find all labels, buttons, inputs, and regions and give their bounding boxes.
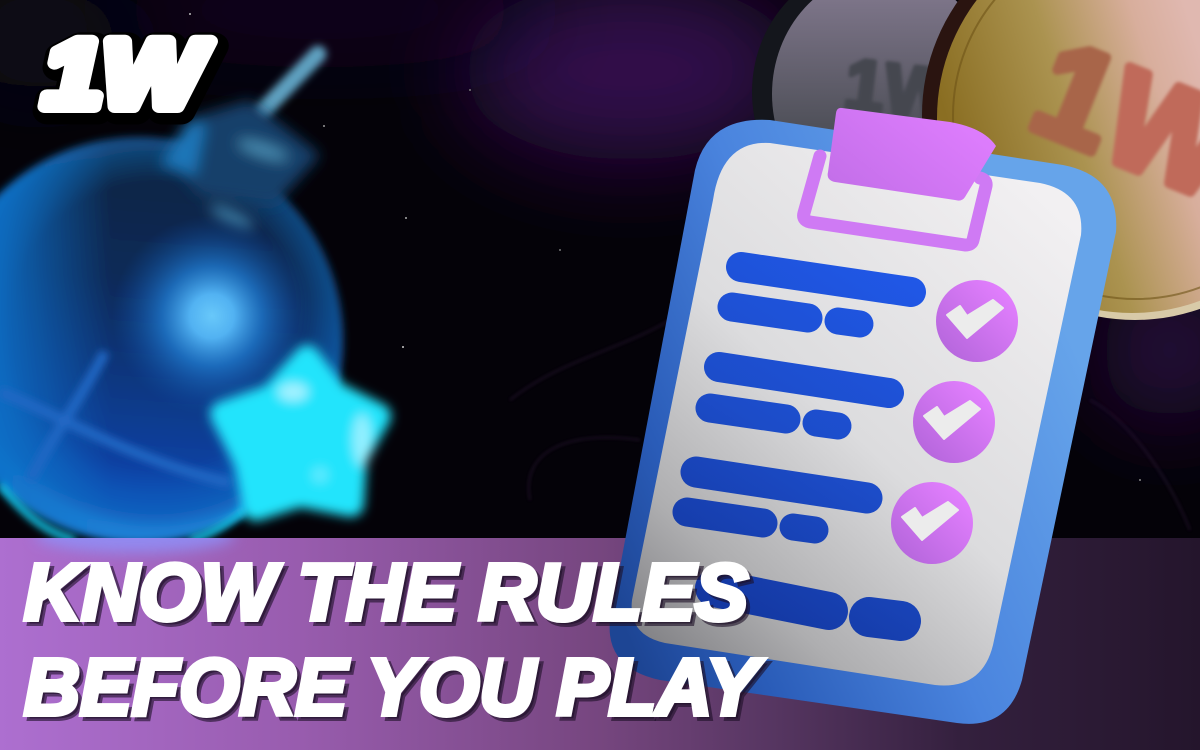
row 2	[710, 367, 995, 463]
heading shadow	[28, 552, 768, 736]
bomb body	[0, 137, 343, 543]
band glow	[34, 538, 238, 560]
bomb cap	[160, 100, 320, 232]
board paper	[632, 143, 1081, 685]
logo: 1W	[46, 26, 214, 132]
star	[223, 358, 378, 508]
bomb highlight	[112, 216, 312, 416]
row 1	[732, 267, 1018, 362]
row 3	[687, 472, 973, 564]
icon: gold coin	[922, 0, 1200, 320]
heading shadow: BEFORE YOU PLAY	[28, 646, 768, 736]
heading	[24, 548, 764, 732]
clip loop	[804, 156, 986, 245]
bottom glow	[0, 485, 245, 540]
clipboard	[610, 108, 1116, 724]
board back	[610, 120, 1116, 724]
icon: blurred bomb	[0, 54, 378, 543]
heading: KNOW THE RULES	[24, 548, 748, 636]
bomb bands	[0, 352, 230, 483]
logo: 1W	[43, 22, 211, 128]
heading shadow: KNOW THE RULES	[28, 552, 752, 640]
icon: silver coin: 1W	[840, 44, 957, 137]
background nebula	[0, 0, 1200, 530]
bomb fuse	[262, 54, 318, 112]
bottom band	[0, 538, 1200, 750]
heading: BEFORE YOU PLAY	[24, 642, 764, 732]
icon: silver coin	[752, 0, 996, 220]
clip top	[828, 108, 996, 201]
row 4	[714, 588, 901, 621]
